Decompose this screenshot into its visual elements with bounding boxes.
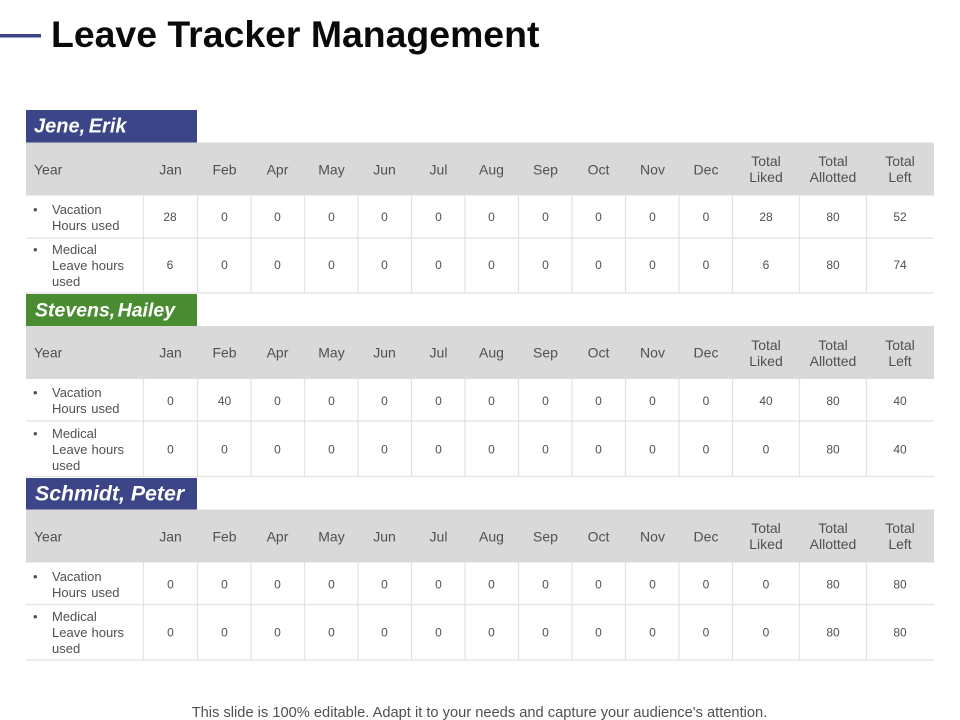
row: medical leave: used <box>52 641 80 656</box>
header row: Jan <box>159 528 182 544</box>
header row: Total <box>885 520 915 536</box>
row: medical leave: 0 <box>167 626 174 640</box>
row: medical leave: Medical <box>52 609 97 624</box>
header row: Jan <box>159 162 182 178</box>
row: medical leave: 0 <box>435 626 442 640</box>
row: vacation hours: • <box>33 569 38 584</box>
row: vacation hours: 0 <box>542 394 549 408</box>
row: vacation hours: 40 <box>893 394 907 408</box>
header row: Total <box>885 153 915 169</box>
row: vacation hours: 0 <box>167 578 174 592</box>
row: medical leave: 0 <box>649 442 656 456</box>
row: medical leave: 0 <box>542 626 549 640</box>
row: medical leave: 0 <box>435 442 442 456</box>
row: medical leave: 74 <box>893 258 907 272</box>
header row: Apr <box>267 162 289 178</box>
header row: Liked <box>749 536 783 552</box>
row: vacation hours: 80 <box>893 578 907 592</box>
row: vacation hours: 80 <box>826 578 840 592</box>
row: vacation hours <box>33 202 907 233</box>
header row: Nov <box>640 344 665 360</box>
row: vacation hours: 0 <box>274 394 281 408</box>
row: vacation hours: Vacation <box>52 202 102 217</box>
header row: Jun <box>373 162 396 178</box>
header row: Nov <box>640 528 665 544</box>
header row: Sep <box>533 528 558 544</box>
row: medical leave: 0 <box>649 258 656 272</box>
header row: Aug <box>479 344 504 360</box>
row: medical leave: 0 <box>274 442 281 456</box>
row: vacation hours: 0 <box>328 210 335 224</box>
row: medical leave: 0 <box>221 626 228 640</box>
row: vacation hours: 40 <box>759 394 773 408</box>
row: medical leave: 0 <box>703 626 710 640</box>
row: medical leave: Leave hours <box>52 625 125 640</box>
row: medical leave <box>33 609 907 656</box>
row: vacation hours: 28 <box>163 210 177 224</box>
header row: Total <box>818 337 848 353</box>
row: vacation hours: 0 <box>649 210 656 224</box>
row: vacation hours: 80 <box>826 210 840 224</box>
row: medical leave: 0 <box>542 258 549 272</box>
row: medical leave: 0 <box>488 626 495 640</box>
row: vacation hours: 0 <box>542 578 549 592</box>
row: medical leave: 0 <box>595 626 602 640</box>
row: medical leave: Leave hours <box>52 258 125 273</box>
header row: Aug <box>479 528 504 544</box>
row: vacation hours: 0 <box>488 210 495 224</box>
row: medical leave: 0 <box>435 258 442 272</box>
row: vacation hours: 28 <box>759 210 773 224</box>
row: vacation hours: 0 <box>488 394 495 408</box>
header row: May <box>318 162 345 178</box>
row lines <box>26 196 934 293</box>
row: medical leave: 0 <box>763 442 770 456</box>
row: vacation hours: 0 <box>649 394 656 408</box>
row: vacation hours: Vacation <box>52 569 102 584</box>
panel: Schmidt, Peter <box>26 478 934 660</box>
row: medical leave: 6 <box>167 258 174 272</box>
row: vacation hours: 0 <box>763 578 770 592</box>
header row: Year <box>34 528 63 544</box>
name banner <box>26 110 197 142</box>
row: medical leave: used <box>52 274 80 289</box>
row: vacation hours: 0 <box>703 210 710 224</box>
header row: Apr <box>267 344 289 360</box>
name banner: Jene, Erik <box>34 116 127 138</box>
header row: Feb <box>212 528 237 544</box>
header row: Jun <box>373 344 396 360</box>
header row: Aug <box>479 162 504 178</box>
row: vacation hours: 0 <box>595 578 602 592</box>
row: vacation hours <box>33 569 907 600</box>
header row: Sep <box>533 162 558 178</box>
header row: May <box>318 344 345 360</box>
name banner <box>26 294 197 326</box>
row: vacation hours: 0 <box>167 394 174 408</box>
row: vacation hours: 0 <box>328 578 335 592</box>
row: medical leave: 0 <box>274 626 281 640</box>
panel: Jene, Erik <box>26 110 934 293</box>
header row: Allotted <box>810 536 856 552</box>
row: medical leave: Medical <box>52 426 97 441</box>
header row: Total <box>751 520 781 536</box>
row: medical leave: 0 <box>221 442 228 456</box>
row: medical leave: 6 <box>763 258 770 272</box>
row: vacation hours: 0 <box>595 394 602 408</box>
header row: Left <box>888 353 912 369</box>
row: medical leave: 0 <box>328 258 335 272</box>
header row: Sep <box>533 344 558 360</box>
row: medical leave: 0 <box>381 442 388 456</box>
row: medical leave: 0 <box>595 258 602 272</box>
header row: Total <box>818 153 848 169</box>
header row: Feb <box>212 344 237 360</box>
header row: Total <box>818 520 848 536</box>
row: vacation hours: 80 <box>826 394 840 408</box>
header row <box>26 510 934 562</box>
header row: Left <box>888 536 912 552</box>
row: medical leave <box>33 242 907 289</box>
row: medical leave: 0 <box>703 258 710 272</box>
row: vacation hours: Hours used <box>52 585 119 600</box>
accent line <box>0 34 41 38</box>
row: vacation hours: 0 <box>274 210 281 224</box>
header row: Left <box>888 169 912 185</box>
header row: Total <box>751 337 781 353</box>
row: vacation hours: 0 <box>703 578 710 592</box>
header row: Total <box>885 337 915 353</box>
name banner <box>26 478 197 510</box>
header row <box>26 142 934 196</box>
header row: Total <box>751 153 781 169</box>
row: medical leave: 0 <box>488 258 495 272</box>
row: vacation hours: Hours used <box>52 218 119 233</box>
row: medical leave: 80 <box>826 626 840 640</box>
title: Leave Tracker Management <box>51 13 539 55</box>
header row: Jul <box>430 344 447 360</box>
header row: Jul <box>430 162 447 178</box>
row: medical leave: 80 <box>826 258 840 272</box>
row: vacation hours: 0 <box>381 210 388 224</box>
header row: Oct <box>588 528 609 544</box>
row: medical leave: 40 <box>893 442 907 456</box>
header row: Liked <box>749 353 783 369</box>
header row <box>26 326 934 379</box>
row: vacation hours: 0 <box>221 578 228 592</box>
name banner: Schmidt, Peter <box>35 482 186 506</box>
row: vacation hours: 52 <box>893 210 907 224</box>
header row: Oct <box>588 344 609 360</box>
row: vacation hours: 0 <box>274 578 281 592</box>
row: vacation hours: 0 <box>488 578 495 592</box>
row: medical leave: • <box>33 609 38 624</box>
row lines <box>26 379 934 476</box>
row: medical leave: 0 <box>595 442 602 456</box>
row: medical leave: 0 <box>381 626 388 640</box>
row: vacation hours: • <box>33 385 38 400</box>
row: vacation hours: 0 <box>435 210 442 224</box>
header row: Jul <box>430 528 447 544</box>
header row: Dec <box>694 162 718 178</box>
row: vacation hours: • <box>33 202 38 217</box>
row: vacation hours: Hours used <box>52 401 119 416</box>
row: medical leave: • <box>33 242 38 257</box>
header row: Apr <box>267 528 289 544</box>
row: vacation hours: 0 <box>435 578 442 592</box>
row: medical leave: 0 <box>328 442 335 456</box>
row: vacation hours: 0 <box>595 210 602 224</box>
row: vacation hours: 0 <box>381 578 388 592</box>
header row: Dec <box>694 344 718 360</box>
name banner: Stevens, Hailey <box>35 300 176 322</box>
header row: Liked <box>749 169 783 185</box>
row: medical leave: Leave hours <box>52 442 125 457</box>
row: vacation hours: 0 <box>703 394 710 408</box>
header row: Oct <box>588 162 609 178</box>
row: medical leave: 80 <box>893 626 907 640</box>
panel: Stevens, Hailey <box>26 294 934 476</box>
row: vacation hours: 0 <box>221 210 228 224</box>
row: medical leave: 0 <box>649 626 656 640</box>
row: medical leave: used <box>52 458 80 473</box>
header row: May <box>318 528 345 544</box>
header row: Jan <box>159 344 182 360</box>
row lines <box>26 562 934 660</box>
row: medical leave: 0 <box>488 442 495 456</box>
row: medical leave: 0 <box>763 626 770 640</box>
row: medical leave: 0 <box>328 626 335 640</box>
row: medical leave: 0 <box>703 442 710 456</box>
header row: Dec <box>694 528 718 544</box>
row: vacation hours: Vacation <box>52 385 102 400</box>
row: vacation hours: 0 <box>649 578 656 592</box>
header row: Nov <box>640 162 665 178</box>
row: medical leave: 0 <box>167 442 174 456</box>
header row: Year <box>34 162 63 178</box>
row: medical leave: 0 <box>274 258 281 272</box>
row: vacation hours: 0 <box>381 394 388 408</box>
row: medical leave: • <box>33 426 38 441</box>
row: vacation hours: 0 <box>542 210 549 224</box>
header row: Allotted <box>810 353 856 369</box>
row: medical leave: 80 <box>826 442 840 456</box>
header row: Feb <box>212 162 237 178</box>
row: vacation hours: 40 <box>218 394 231 408</box>
row: vacation hours <box>33 385 907 416</box>
header row: Year <box>34 344 63 360</box>
header row: Jun <box>373 528 396 544</box>
row: medical leave: 0 <box>542 442 549 456</box>
row: medical leave: 0 <box>381 258 388 272</box>
row: medical leave: 0 <box>221 258 228 272</box>
header row: Allotted <box>810 169 856 185</box>
row: vacation hours: 0 <box>328 394 335 408</box>
row: medical leave: Medical <box>52 242 97 257</box>
row: medical leave <box>33 426 907 473</box>
row: vacation hours: 0 <box>435 394 442 408</box>
